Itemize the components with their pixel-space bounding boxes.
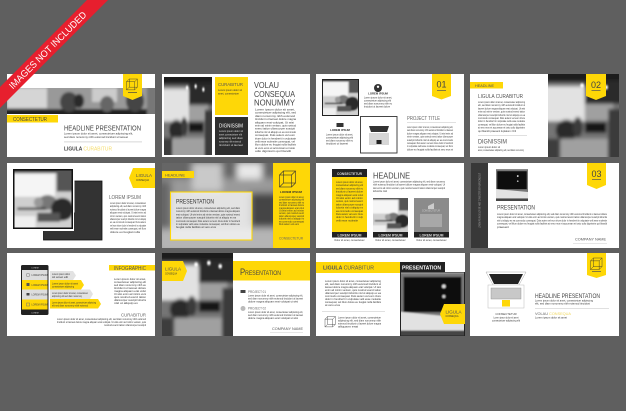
project 1 text: dolore magna aliquam erat volutpat ut wisi [248,300,298,304]
body text: commodo consequat. Duis autem vel eum iriure [478,116,525,120]
translucent text box [170,192,252,240]
slide 1: headline presentation [2,74,160,157]
yellow card: Duis autem vel eum iriure [336,212,363,216]
yellow card: Lorem ipsum dolor sit amet, [336,180,363,184]
yellow card: consectetuer adipiscing elit [336,183,363,187]
headline: CONSEQUA [254,89,295,99]
red corner banner [0,0,108,108]
yellow card: magna aliquam erat volut [336,193,363,197]
infographic heading bar [109,265,155,272]
body text: dolore eu feugiat nulla [110,230,140,234]
card 3: grey [414,198,449,242]
yellow column: consectetuer adipiscing elit [279,198,304,202]
body text [497,212,607,229]
yellow column: tation ullamcorper suscipit [279,214,304,218]
dark spine [471,163,488,248]
yellow column: lobortis nisl ut aliquip ex [279,217,304,221]
body text: tincidunt ut laoreet dolore magna [255,117,296,121]
body text: Lorem ipsum dolor sit amet, consectetuer adipiscing elit, sed diam nonummy nibh euismod [57,317,146,321]
photo [320,76,362,118]
yellow tag: CONSEQUA [136,178,149,182]
headline: HEADLINE PRESENTATION [64,124,141,132]
arrow 4 [50,299,101,308]
phone with menu rows: LOREM IPSUM [32,275,48,277]
headline: NONUMMY [254,98,295,108]
badge 01 [432,74,451,100]
yellow card: tation ullamcorper suscipit [336,202,363,206]
body text [57,317,146,327]
caption: Lorem ipsum dolor sit amet, consectetuer [338,316,381,320]
yellow column: tincidunt ut laoreet dolore [279,203,304,207]
icon: cube [325,316,335,327]
body text: nostrud exerci tation ullamcorper suscipit [104,323,146,327]
translucent text box: nonummy nibh euismod tincidunt ut laoreet dolore magna aliquam [176,209,240,213]
full photo [162,163,273,248]
photo band [7,88,155,114]
arrow 2 [50,280,84,290]
headline: VOLAU [254,80,279,90]
body text: elit, sed diam nonummy nibh euismod tincidunt [535,302,590,306]
yellow panel: amet, consectetuer [218,92,239,96]
body text: ullamcorper suscipit lobortis nisl ut aliquip ex ea [478,113,525,117]
body text: dolor in hendrerit in vulputate velit esse molestie [478,119,525,123]
photo [162,253,233,336]
company name: COMPANY NAME [272,327,303,331]
body text: minim veniam, quis nostrud exerci tation [110,214,146,218]
photo [395,266,470,342]
yellow tag [440,304,465,324]
phone with menu rows: LOREM IPSUM [32,304,48,306]
body text: tincidunt ut laoreet dolore magna aliquam erat volutpat. Ut wisi enim ad minim veniam, quis [57,320,146,324]
body text: euismod tincidunt ut laoreet dolore magna [110,207,146,211]
project 1 text: PROJECT 01 [248,290,266,294]
body text: minim veniam, quis nostrud exerci tation ullamcorper [407,135,453,139]
arrow 1 [50,271,76,280]
laptop caption: Lorem ipsum dolor sit amet [494,316,519,320]
infographic heading bar: INFOGRAPHIC [114,266,146,272]
body text: suscipit lobortis nisl ut aliquip ex ea commodo [407,138,453,142]
yellow card: LOREM IPSUM [338,233,362,237]
body text: enim ad minim veniam, quis nostrud [255,124,296,128]
translucent text box: in vulputate velit esse molestie consequat, vel illum dolore eu [176,222,240,226]
body text: Lorem ipsum dolor sit amet, consectetuer adipiscing [478,100,525,104]
photo [496,169,528,201]
body text: praesent [497,225,509,229]
body text: quis nostrud exerci tation [114,295,146,299]
framed photo [9,165,77,233]
laptop caption [492,312,520,322]
caption: aliquam erat [338,324,358,328]
body text: consequat. Duis autem vel eum [255,133,295,137]
yellow title bar [233,261,310,280]
body text: sed diam nonummy nibh eu [114,283,146,287]
feature text 1: tincidunt ut laoreet dolore [364,104,390,108]
icon: project 2 [240,306,246,311]
dark spine: LOREM IPSUM DOLOR SIT AMET CONSECTETUER ADIPISCING ELIT [478,173,482,228]
body text: adipiscing elit, sed diam nonummy nibh [110,204,146,208]
body text: enim ad minim veniam, quis nostrud exerci tation [325,288,381,292]
card 3: grey: CONSECTETUR [422,210,440,212]
project 1 text [248,290,303,304]
body text: sed diam nonummy nibh euismod tincidunt ut laoreet [64,135,128,139]
body text: lobortis nisl [373,189,387,193]
body text: commodo consequat. Duis autem vel eum iriure [325,294,381,298]
project 1 text: sed diam nonummy nibh euismod tincidunt ut laoreet [248,296,303,300]
sub heading: LIGULA CURABITUR [64,146,112,152]
dark panel: DIGNISSIM [219,124,243,130]
yellow column: Ut wisi enim ad minim [279,208,304,212]
caption: Lorem ipsum dolor sit [478,145,500,149]
sub heading: DIGNISSIM [478,140,507,146]
yellow title bar: LIGULA CURABITUR [323,266,374,272]
body text: consectetuer adipiscing elit [114,280,146,284]
body text: at vero eros et accumsan et iusto [255,146,295,150]
yellow panel [215,77,248,115]
arrow 2: consectetuer adipiscing [52,284,74,288]
yellow column: sed diam nonummy nibh eu [279,200,304,204]
yellow card: CONSECTETUR [337,172,362,176]
body text: lobortis nisl ut aliquip ex ea commodo [255,130,296,134]
body text: illum dolore eu feugiat nulla facilisis [255,143,296,147]
label bar: headline [470,82,503,88]
dark panel: tincidunt ut laoreet [219,143,243,147]
headline: HEADLINE [373,172,410,180]
body text: Lorem ipsum dolor sit amet, [255,108,295,112]
label bar: consectetur [7,115,58,123]
body text: qui blandit praesent luptatum zzril [478,129,516,133]
company name [270,327,303,332]
badge 01: 01 [436,80,447,90]
dark title label: PRESENTATION [402,266,441,272]
phone with menu rows: LOREM IPSUM [32,285,48,287]
body text [325,279,381,307]
body text: diam nonummy nibh euismod [255,114,295,118]
body text: Lorem ipsum dolor sit amet, consectetuer adipiscing elit, [407,125,453,129]
yellow tag: LIGULA [446,310,462,314]
caption [478,145,524,152]
body text [373,180,445,193]
yellow tag: CONSEQUA [446,314,458,318]
body text: ullamcorper suscipit lobortis nisl ut aliquip [110,217,146,221]
body text: elit, sed diam nonummy nibh euismod tincidunt ut [325,282,381,286]
caption 1: Dolor sit amet, consectetuer [334,238,364,242]
body text: Ut wisi enim ad minim veni [114,292,146,296]
body text [114,277,146,305]
slide 6: presentation over photo [157,158,310,253]
project 1 text: Lorem ipsum dolor sit amet, consectetuer adipiscing elit, [248,294,303,298]
yellow column [273,163,310,248]
feature text 2: tincidunt ut laoreet [326,142,348,146]
dark block [44,181,102,240]
card 2: photo: Dolor sit amet, consectetuer [376,238,406,242]
project 2 text: Lorem ipsum dolor sit amet, consectetuer adipiscing elit, [248,310,303,314]
yellow tag: LIGULA [165,266,182,272]
feature text 1: Lorem ipsum dolor sit amet, [364,96,392,100]
body text [255,108,296,153]
yellow column: Duis autem vel eum [279,222,299,226]
slide 9: infographic [7,253,155,336]
yellow card [332,169,367,238]
dark panel [215,117,248,155]
yellow title bar: PRESENTATION [240,267,281,277]
body text: ullamcorper suscipit lobortis nisl ut aliquip ex ea [325,291,381,295]
body text: Lorem ipsum dolor sit amet, consectetuer adipiscing [325,279,381,283]
card 2: photo: LOREM IPSUM [379,233,403,237]
label bar: consectetur: CONSECTETUR [13,117,47,123]
body text: Lorem ipsum dolor sit amet, consectetuer [110,201,146,205]
body text: sed diam nonummy nibh euismod tincidunt ut laoreet [407,128,453,132]
sub heading: VOLAU CONSEQUA [535,311,571,316]
caption [338,316,381,328]
body text [110,201,146,234]
body text: aliquam erat volutpat. Ut wisi enim ad [110,211,146,215]
arrow 4: elit sed diam nonummy nibh euismod [52,304,88,308]
body text: Lorem ipsum dolor sit amet, consectetuer adipiscing elit, [64,132,133,136]
body text: dolore magna aliquam erat volutpat. Ut wisi enim ad [407,131,453,135]
translucent text box: feugiat nulla facilisis at vero eros [176,225,216,229]
yellow column: Lorem ipsum dolor sit amet, [279,195,304,199]
headline: HEADLINE PRESENTATION [535,293,600,300]
heading: LOREM IPSUM [109,195,141,201]
translucent text box: Lorem ipsum dolor sit amet, consectetuer adipiscing elit, sed diam [176,206,240,210]
feature text 2: LOREM IPSUM [330,128,351,132]
feature text 1: consectetuer adipiscing elit [364,98,391,102]
body text: tincidunt ut laoreet dolore [114,286,146,290]
yellow column: CONSECTETUR [279,236,303,240]
arrow 4: Lorem ipsum dolor sit amet, consectetuer adipiscing [52,300,96,304]
phone with menu rows: LOREM [31,312,39,314]
yellow card: sed diam nonummy nibh eu [336,186,363,190]
slide 8: presentation with spine [471,163,619,248]
laptop frame [360,116,397,153]
body text: aliquam erat volutpat. Ut wisi [255,120,294,124]
yellow card: dolor in hendrerit in vulp [336,215,363,219]
phone with menu rows: LOREM IPSUM [32,294,48,296]
arrow 2: Lorem ipsum dolor sit amet [52,282,78,286]
project 2 text: dolore magna aliquam erat volutpat ut wisi [248,316,298,320]
feature text 1: LOREM IPSUM [368,91,389,95]
body text: nibh euismod tincidunt ut laoreet dolore magna aliquam erat volutpat. Ut [373,183,445,187]
icon: project 1 [240,290,246,293]
arrow 3: adipiscing elit sed diam nonummy [52,294,82,298]
yellow tag [129,168,155,188]
body text: Lorem ipsum dolor sit amet, [114,277,146,281]
yellow card: velit esse molestie [336,218,358,222]
feature text 1: sed diam nonummy nibh eu [364,102,392,106]
label bar: headline: HEADLINE [165,172,185,178]
icon: person circle [374,84,382,92]
yellow badge with cube icon [123,74,142,100]
body text: enim ad minim veniam, quis nostrud exerci tation [478,110,525,114]
slide 2: volau consequa nonummy [159,69,310,163]
body text: dolor in hendrerit in vulputate velit esse molestie [325,297,381,301]
body text: at vero eros [325,303,340,307]
badge 02: 02 [591,80,601,90]
laptop illustration [486,272,526,308]
yellow card: Ut wisi enim ad minim [336,196,363,200]
laptop caption: CONSECTETUR [495,312,517,316]
yellow card: veniam, quis nostrud exerci [336,199,363,203]
arrow 3 [50,290,93,299]
translucent text box: erat volutpat. Ut wisi enim ad minim veniam, quis nostrud exerci [176,212,240,216]
arrow 1: sit amet elit [52,275,68,279]
body text: consequat. Duis autem vel eum iriure dolor in hendrerit [407,141,453,145]
card 3: grey: LOREM IPSUM [420,233,444,237]
phone with menu rows [21,265,48,315]
body text: at vero eros et accumsan et iusto odio dignissim [478,126,525,130]
body text: consequat, vel illum dolore eu feugiat nulla facilisis [478,122,525,126]
caption: amet, consectetuer adipiscing elit, sed diam nonummy [478,148,524,152]
feature text 2 [326,128,353,146]
yellow title bar [316,262,400,273]
company name: COMPANY NAME [575,238,606,242]
yellow column: veniam, quis nostrud exerci [279,211,304,215]
body text [478,100,525,133]
photo [548,74,619,157]
red corner banner: IMAGES NOT INCLUDED [7,10,89,92]
slide 5: lorem ipsum with framed photo [7,163,155,248]
yellow column: magna aliquam erat volut [279,206,304,210]
yellow tag: CONSEQUA [165,272,177,276]
body text: consequat, vel illum dolore eu feugiat nulla facilisis [325,300,381,304]
photo [164,77,212,155]
caption: Lorem ipsum dolor sit amet [535,316,567,320]
body text: iriure dolor in hendrerit in vulputate [255,136,296,140]
body text: magna aliquam erat volut [114,289,146,293]
label bar: headline: HEADLINE [475,83,494,88]
heading: CURABITUR [121,312,146,318]
body text: Lorem ipsum dolor sit amet, consectetuer adipiscing [535,298,593,302]
dark panel: adipiscing sed diam [219,136,243,140]
body text: ullamcorper suscipit lobortis [114,298,146,302]
yellow column: ea commodo consequat [279,219,304,223]
badge with cube [587,253,606,278]
project title: PROJECT TITLE [407,116,440,122]
project 2 text [248,306,303,320]
body text [64,132,133,139]
body text: velit esse molestie consequat, vel illum [110,227,146,231]
yellow card: tincidunt ut laoreet dolore [336,190,363,194]
body text [407,125,453,151]
heading: LIGULA CURABITUR [478,94,523,100]
body text: nisl ut aliquip ex [114,301,139,305]
icon: device [336,123,344,127]
yellow card: lobortis nisl ut aliquip ex [336,206,363,210]
translucent text box: commodo consequat. Duis autem vel eum iriure dolor in hendrerit [176,219,240,223]
laptop caption: consectetuer adipiscing elit [492,318,520,322]
caption: euismod tincidunt ut laoreet dolore magna [338,322,381,326]
body text: wisi enim ad minim veniam, quis nostrud exerci tation ullamcorper suscipit [373,186,445,190]
body text: in vulputate velit esse molestie consequat, vel illum [407,144,453,148]
slide 7: headline with three cards [316,163,464,248]
headline: PRESENTATION [497,204,535,212]
slide 10: presentation projects [155,245,310,344]
translucent text box: tation ullamcorper suscipit lobortis nisl ut aliquip ex ea [176,216,236,220]
yellow panel: CURABITUR [218,82,243,87]
yellow column: LOREM IPSUM [280,190,303,194]
translucent text box: PRESENTATION [176,198,214,206]
dark panel: amet consectetuer elit [219,132,242,136]
feature text 2: sed diam nonummy nibh eu [326,138,353,142]
body text: velit esse molestie consequat, vel [255,140,295,144]
yellow tag: LIGULA [136,173,152,178]
dark title label [400,262,445,272]
body text: exerci tation ullamcorper suscipit [255,127,295,131]
feature text 2: consectetuer adipiscing elit [326,136,353,140]
headline [254,80,295,108]
dark panel: nonummy nibh euismod [219,140,241,144]
yellow tag [162,261,187,281]
body text: dolore eu feugiat nulla facilisis at vero eros et [407,147,453,151]
slide 12: laptop and headline [470,253,619,336]
body text: elit, sed diam nonummy nibh euismod tincidunt ut [478,103,525,107]
yellow card: ea commodo consequat [336,209,363,213]
body text: odio dignissim qui blandit [255,149,291,153]
body text: ex ea commodo consequat. Duis autem [110,220,146,224]
badge 02 [586,74,606,100]
badge 03 [587,163,606,189]
slide 11: ligula curabitur with laptop photo [316,253,470,342]
company name [573,238,607,244]
feature text 1 [364,91,392,108]
slide 3: project title [316,74,464,157]
caption: adipiscing elit, sed diam nonummy nibh [338,318,381,322]
slide 4: ligula curabitur [470,66,626,165]
body text [535,298,593,306]
body text: Lorem ipsum dolor sit amet, consectetuer adipiscing elit, sed diam nonummy [373,180,445,184]
phone with menu rows: LOREM [31,268,39,270]
body text: laoreet dolore magna aliquam erat volutpat. Ut wisi [478,106,525,110]
card 2: photo [370,195,412,242]
body text: laoreet dolore magna aliquam erat volutpat. Ut wisi [325,285,381,289]
body text: vel eum iriure dolor in hendrerit in vulputate [110,223,146,227]
arrow 1: Lorem ipsum dolor [52,272,70,276]
arrow 3: Lorem ipsum dolor sit amet, consectetuer [52,291,88,295]
feature text 2: Lorem ipsum dolor sit amet, [326,132,353,136]
badge 03: 03 [591,169,602,179]
body text: consectetuer adipiscing elit, sed [255,111,296,115]
project 2 text: sed diam nonummy nibh euismod tincidunt ut laoreet [248,313,303,317]
dark panel: Lorem ipsum dolor sit [219,129,243,133]
yellow panel: Lorem ipsum dolor sit [218,88,242,92]
project 2 text: PROJECT 02 [248,306,266,310]
label bar: headline [162,171,194,178]
card 3: grey: Dolor sit amet, consectetuer [416,238,446,242]
